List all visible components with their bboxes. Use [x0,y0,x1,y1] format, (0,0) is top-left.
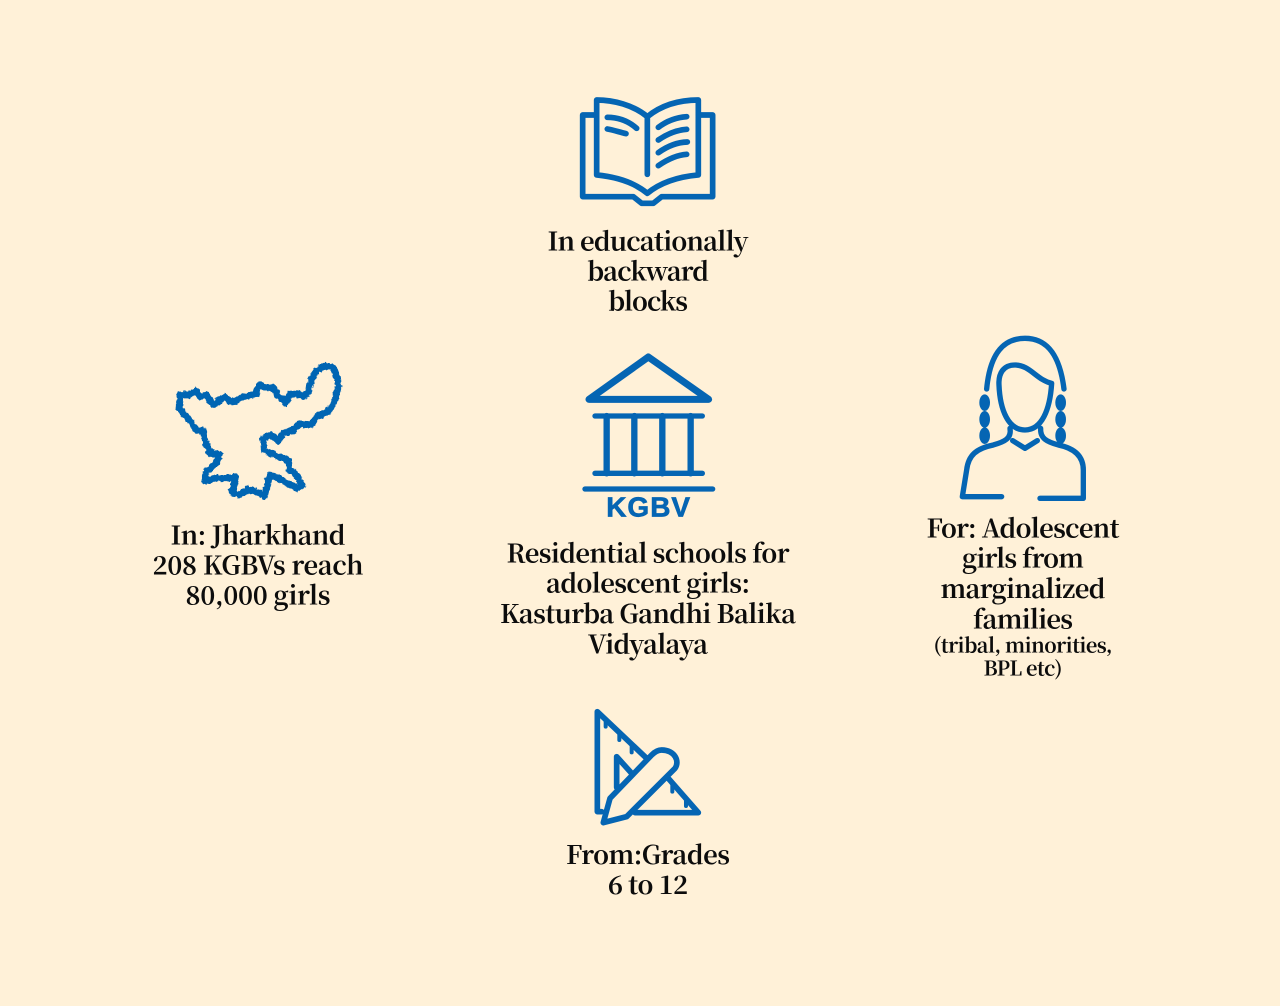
text: residential schools [500,535,796,662]
icon: Jharkhand map [179,366,338,497]
text: grades 6 to 12 [566,836,730,902]
text: residential schools: Kasturba Gandhi Balika [500,595,796,631]
text: adolescent girls from marginalized families: marginalized [940,570,1106,606]
text: residential schools: adolescent girls: [546,565,750,601]
text: educationally backward blocks: In educationally [548,223,749,259]
text: Jharkhand reach: 80,000 girls [186,577,330,613]
text: Jharkhand reach [152,517,364,613]
icon: set square and pencil [597,712,698,823]
text: adolescent girls from marginalized families: (tribal, minorities, [934,630,1112,659]
text: residential schools: Residential schools for [506,535,790,571]
icon: KGBV school building: KGBV [606,492,691,523]
icon: adolescent girl [962,338,1083,498]
text: adolescent girls from marginalized families [926,510,1120,682]
text: adolescent girls from marginalized families: For: Adolescent [926,510,1120,546]
text: educationally backward blocks [548,223,749,319]
text: grades 6 to 12: From:Grades [566,836,730,872]
icon: open book [583,100,713,203]
text: educationally backward blocks: backward [587,253,709,289]
text: adolescent girls from marginalized families: families [973,600,1073,636]
text: educationally backward blocks: blocks [608,283,688,319]
text: Jharkhand reach: 208 KGBVs reach [152,547,364,583]
text: Jharkhand reach: In: Jharkhand [170,517,346,553]
icon: KGBV school building [585,357,713,523]
text: residential schools: Vidyalaya [588,626,708,662]
text: grades 6 to 12: 6 to 12 [608,866,688,902]
text: adolescent girls from marginalized families: girls from [962,540,1084,576]
text: adolescent girls from marginalized families: BPL etc) [984,653,1062,682]
